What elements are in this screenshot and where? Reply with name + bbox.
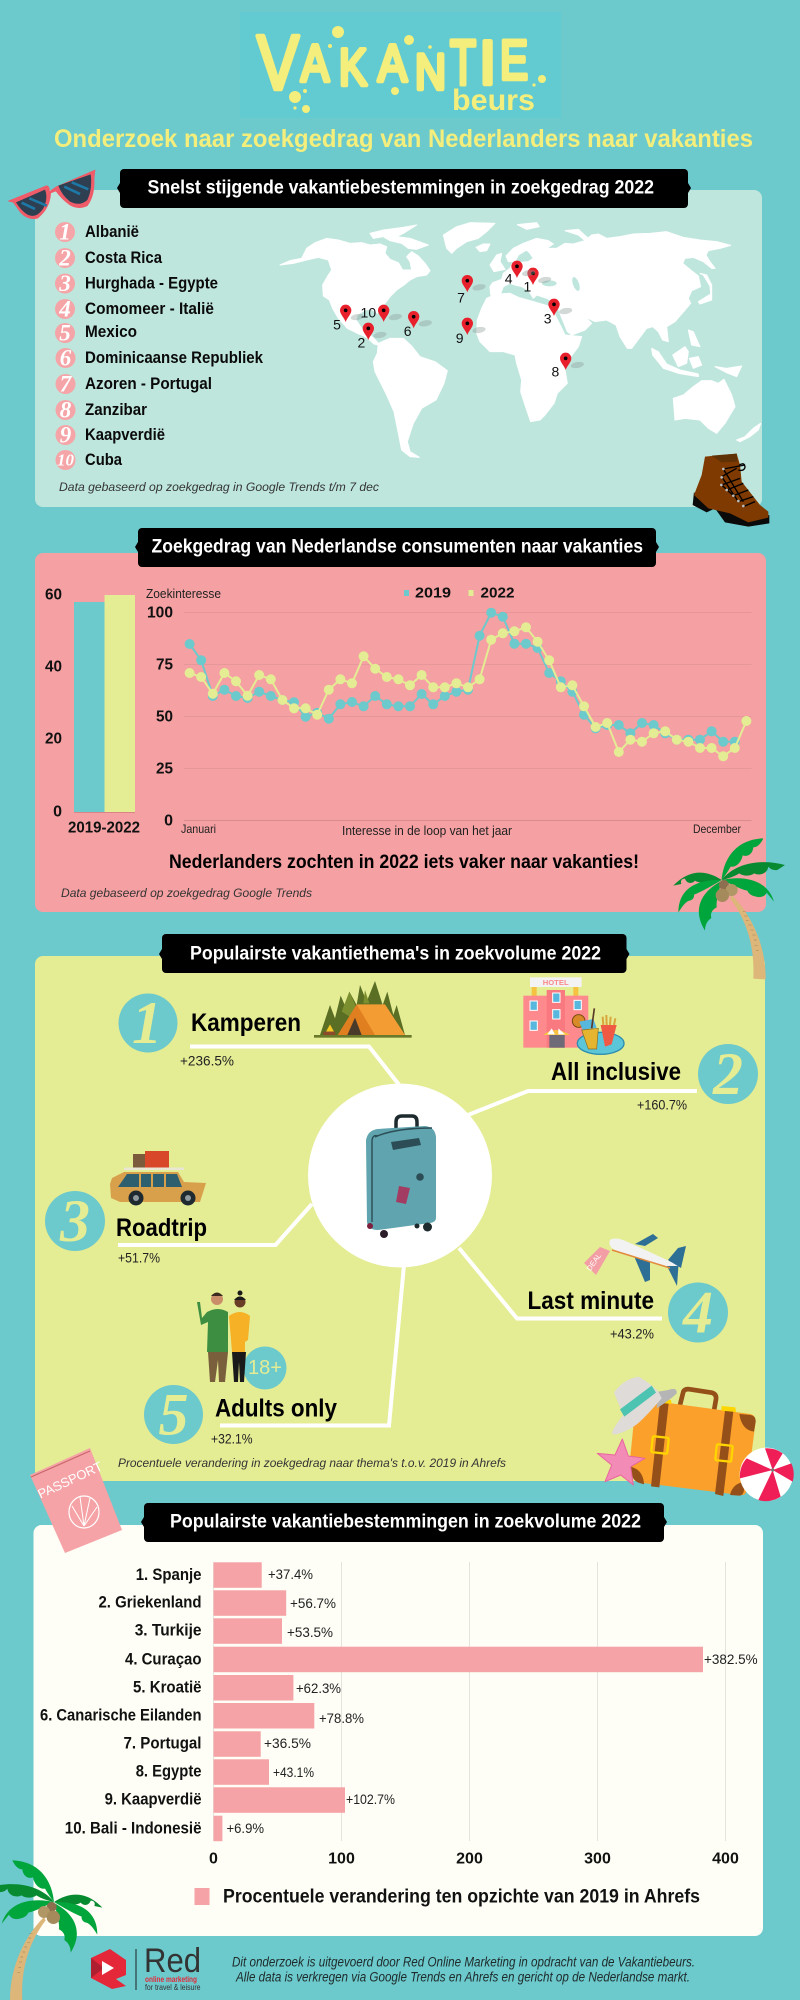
logo: Vakantiebeurs: K	[339, 39, 367, 97]
line chart zoekinteresse: Zoekinteresse	[146, 587, 221, 601]
map pins	[340, 261, 584, 370]
ranked list of destinations: Zanzibar	[85, 401, 148, 419]
logo: Red online marketing: Red	[144, 1942, 201, 1980]
ranked list of destinations: 6	[60, 346, 72, 370]
theme 5: adults only: Adults only	[215, 1394, 337, 1422]
bar chart 2019-2022: 40	[45, 658, 62, 676]
ranked list of destinations: 4	[58, 296, 71, 322]
logo: Vakantiebeurs: A	[301, 35, 329, 93]
horizontal bar chart: 5. Kroatië	[133, 1679, 202, 1697]
heading: thema's	[159, 934, 630, 973]
horizontal bar chart: 400	[712, 1850, 739, 1868]
ranked list of destinations	[55, 220, 264, 470]
theme 4: last minute: +43.2%	[610, 1326, 654, 1342]
heading: zoekgedrag	[135, 528, 659, 567]
theme 3: roadtrip: 3	[59, 1188, 90, 1254]
icon: couple with 18+: 18+	[248, 1357, 282, 1379]
icon: car with luggage	[110, 1151, 206, 1206]
theme 1: kamperen	[118, 981, 412, 1068]
icon: couple with 18+	[197, 1290, 286, 1390]
horizontal bar chart: 3. Turkije	[135, 1622, 202, 1640]
ranked list of destinations: 1	[59, 220, 71, 244]
theme 2: all inclusive: All inclusive	[551, 1058, 681, 1086]
logo: Red online marketing: online marketing	[145, 1975, 197, 1984]
main title: Onderzoek naar zoekgedrag van Nederlanders naar vakanties	[54, 125, 753, 153]
line chart zoekinteresse: 0	[164, 812, 173, 830]
theme 1: kamperen: +236.5%	[180, 1054, 234, 1068]
horizontal bar chart: 8. Egypte	[136, 1763, 202, 1781]
map pin numbers	[333, 270, 559, 379]
heading: snelst stijgende	[117, 169, 691, 208]
line chart zoekinteresse: 25	[156, 760, 173, 778]
theme 5: adults only	[144, 1290, 337, 1448]
line chart zoekinteresse: 75	[156, 656, 173, 674]
horizontal bar chart: 200	[456, 1850, 483, 1868]
heading: snelst stijgende: Snelst stijgende vakantiebestemmingen in zoekgedrag 2022	[148, 178, 654, 198]
legend: 2019	[415, 584, 451, 602]
icon: palm tree bottom	[0, 1860, 102, 2000]
starfish	[597, 1439, 645, 1485]
horizontal bar chart: 6. Canarische Eilanden	[40, 1707, 202, 1725]
ranked list of destinations: 9	[60, 422, 72, 448]
logo: Vakantiebeurs: V	[257, 20, 300, 106]
map pin numbers: 10	[361, 304, 376, 320]
ranked list of destinations: Costa Rica	[85, 249, 163, 267]
horizontal bar chart: +78.8%	[319, 1710, 364, 1726]
theme 2: all inclusive: +160.7%	[637, 1098, 687, 1112]
icon: plane with deal tag: DEAL	[585, 1251, 603, 1273]
ranked list of destinations: Cuba	[85, 451, 123, 469]
theme 3: roadtrip	[45, 1151, 207, 1266]
ranked list of destinations: Hurghada - Egypte	[85, 274, 218, 292]
ranked list of destinations: 10	[57, 450, 74, 470]
horizontal bar chart: +53.5%	[287, 1624, 333, 1640]
map pin numbers: 2	[357, 334, 365, 350]
bar chart 2019-2022	[45, 586, 140, 836]
footnote panel 3: Procentuele verandering in zoekgedrag naar thema's t.o.v. 2019 in Ahrefs	[118, 1458, 506, 1470]
legend	[404, 584, 514, 602]
logo: Vakantiebeurs: N	[415, 44, 446, 100]
map pin numbers: 1	[523, 279, 531, 295]
footnote panel 2: Data gebaseerd op zoekgedrag Google Trends	[61, 888, 312, 900]
footnote panel 1: Data gebaseerd op zoekgedrag in Google Trends t/m 7 dec	[59, 482, 379, 494]
theme 2: all inclusive: 2	[712, 1041, 743, 1107]
line chart zoekinteresse: Januari	[181, 822, 216, 836]
logo: Vakantiebeurs: I	[479, 29, 496, 98]
map pin numbers: 8	[551, 363, 559, 379]
icon: tent	[314, 981, 412, 1038]
line chart zoekinteresse: 50	[156, 708, 173, 726]
ranked list of destinations: 7	[60, 372, 73, 396]
series 2022	[190, 627, 746, 756]
logo: Vakantiebeurs: E	[500, 28, 528, 91]
footer note: Dit onderzoek is uitgevoerd door Red Online Marketing in opdracht van de Vakantiebeurs.	[232, 1954, 695, 1970]
icon: plane with deal tag	[584, 1234, 686, 1286]
theme 5: adults only: +32.1%	[211, 1432, 252, 1446]
ranked list of destinations: Albanië	[85, 223, 139, 241]
horizontal bar chart: 300	[584, 1850, 611, 1868]
icon: hotel and drinks	[523, 977, 624, 1054]
map pin numbers: 3	[544, 310, 552, 326]
horizontal bar chart: 10. Bali - Indonesië	[65, 1820, 202, 1838]
central circle with suitcase	[308, 1084, 492, 1268]
horizontal bar chart: +56.7%	[290, 1595, 336, 1611]
ranked list of destinations: 5	[59, 320, 71, 346]
horizontal bar chart: +102.7%	[346, 1791, 395, 1807]
legend bestemmingen: Procentuele verandering ten opzichte van 2019 in Ahrefs	[223, 1886, 700, 1908]
horizontal bar chart: +37.4%	[268, 1566, 313, 1582]
theme 1: kamperen: 1	[132, 990, 162, 1056]
heading: bestemmingen	[141, 1503, 667, 1542]
icon: passport: PASSPORT	[35, 1458, 105, 1502]
logo: Red online marketing	[91, 1942, 201, 1992]
panel: zoekgedrag consumenten	[35, 528, 766, 912]
ranked list of destinations: 3	[58, 271, 71, 296]
theme 4: last minute: Last minute	[528, 1287, 654, 1315]
legend: 2022	[480, 584, 514, 602]
horizontal bar chart	[40, 1562, 758, 1868]
logo: Red online marketing: for travel & leisure	[145, 1983, 201, 1992]
theme 1: kamperen: Kamperen	[191, 1009, 301, 1037]
theme 4: last minute	[528, 1234, 728, 1346]
icon: hat, suitcase, starfish and beach ball	[597, 1377, 794, 1501]
line chart zoekinteresse: 100	[147, 604, 173, 622]
map pin numbers: 5	[333, 316, 341, 332]
horizontal bar chart: 2. Griekenland	[98, 1594, 202, 1612]
horizontal bar chart: 100	[328, 1850, 355, 1868]
hat	[612, 1377, 677, 1434]
ranked list of destinations: Mexico	[85, 323, 137, 341]
map pin numbers: 6	[404, 323, 412, 339]
horizontal bar chart: 7. Portugal	[124, 1735, 202, 1753]
bar chart 2019-2022: 20	[45, 730, 62, 748]
suitcase	[630, 1389, 756, 1496]
ranked list of destinations: 8	[60, 398, 72, 422]
panel: populairste bestemmingen	[34, 1503, 763, 1936]
icon: sunglasses	[8, 170, 95, 219]
footer note	[232, 1954, 695, 1984]
world map with pins	[280, 223, 761, 457]
map pin numbers: 7	[457, 289, 465, 305]
theme 3: roadtrip: Roadtrip	[116, 1214, 207, 1242]
theme 2: all inclusive	[523, 977, 758, 1112]
icon: passport	[30, 1448, 122, 1553]
map pin numbers: 9	[456, 330, 464, 346]
horizontal bar chart: 4. Curaçao	[125, 1651, 202, 1669]
horizontal bar chart: +382.5%	[704, 1651, 758, 1667]
bar chart 2019-2022: 0	[53, 804, 62, 820]
beach ball	[740, 1448, 794, 1501]
theme 4: last minute: 4	[682, 1280, 713, 1346]
heading: zoekgedrag: Zoekgedrag van Nederlandse consumenten naar vakanties	[152, 536, 643, 558]
icon: hiking boot	[693, 454, 769, 527]
logo: Vakantiebeurs: A	[378, 35, 407, 93]
logo: Vakantiebeurs: T	[450, 28, 476, 98]
horizontal bar chart: 9. Kaapverdië	[105, 1791, 202, 1809]
horizontal bar chart: +43.1%	[273, 1764, 314, 1780]
theme 5: adults only: 5	[158, 1382, 188, 1448]
horizontal bar chart: +62.3%	[296, 1680, 341, 1696]
panel: snelst stijgende bestemmingen	[35, 169, 762, 507]
icon: hotel and drinks: HOTEL	[543, 978, 569, 987]
icon: palm tree top	[673, 838, 785, 979]
ranked list of destinations: Azoren - Portugal	[85, 375, 212, 393]
panel: vakantiethema's	[35, 934, 765, 1481]
ranked list of destinations: Comomeer - Italië	[85, 300, 214, 318]
ranked list of destinations: Kaapverdië	[85, 426, 165, 444]
line chart zoekinteresse	[146, 584, 752, 838]
heading: bestemmingen: Populairste vakantiebestemmingen in zoekvolume 2022	[170, 1512, 641, 1532]
connector lines	[118, 1046, 697, 1426]
line chart zoekinteresse: December	[693, 822, 741, 836]
ranked list of destinations: Dominicaanse Republiek	[85, 349, 264, 367]
horizontal bar chart: 1. Spanje	[136, 1566, 202, 1584]
map pin numbers: 4	[505, 270, 513, 286]
series 2019	[190, 613, 735, 742]
ranked list of destinations: 2	[58, 246, 71, 270]
bar chart 2019-2022: 2019-2022	[68, 820, 140, 836]
heading: thema's: Populairste vakantiethema's in zoekvolume 2022	[190, 944, 601, 964]
line chart zoekinteresse: Interesse in de loop van het jaar	[342, 824, 512, 838]
footer note: Alle data is verkregen via Google Trends en Ahrefs en gericht op de Nederlandse markt.	[235, 1970, 690, 1984]
bar chart 2019-2022: 60	[45, 586, 62, 604]
horizontal bar chart: 0	[209, 1850, 218, 1868]
horizontal bar chart: +6.9%	[226, 1820, 264, 1836]
logo: Vakantiebeurs: beurs	[452, 84, 535, 117]
theme 3: roadtrip: +51.7%	[118, 1250, 160, 1266]
callout: Nederlanders zochten in 2022 iets vaker naar vakanties!	[169, 851, 639, 873]
horizontal bar chart: +36.5%	[264, 1735, 311, 1751]
logo: Vakantiebeurs	[240, 12, 561, 118]
